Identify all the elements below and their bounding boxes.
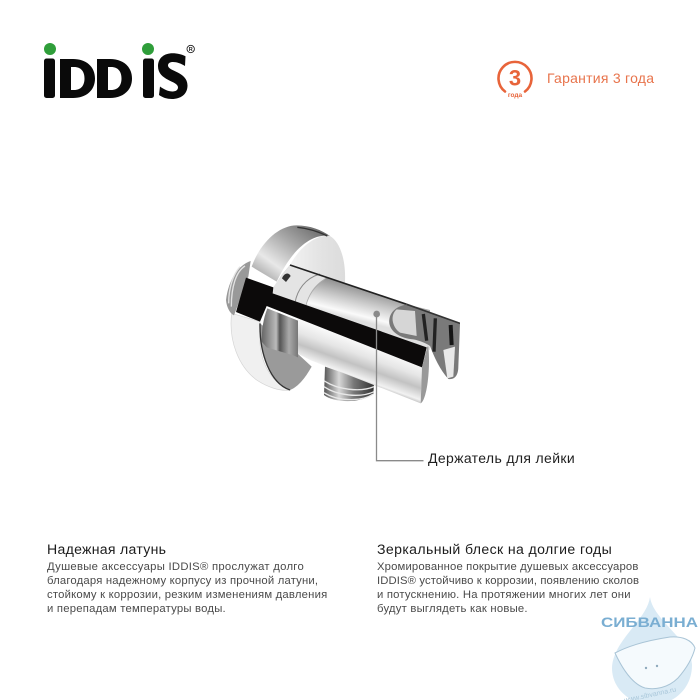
body: mirror shine: Хромированное покрытие душевых аксессуаров <box>377 561 638 573</box>
lower threaded outlet <box>324 367 374 401</box>
callout leader line <box>376 317 424 462</box>
logo: IDDIS <box>44 43 195 99</box>
holder hook and slot <box>389 304 460 379</box>
body: brass <box>47 561 327 615</box>
body: mirror shine: и потускнению. На протяжении многих лет они <box>377 589 631 601</box>
holder arm lower body <box>267 306 422 403</box>
body: mirror shine <box>377 561 639 615</box>
body: mirror shine: будут выглядеть как новые. <box>377 603 528 615</box>
logo: IDDIS: R <box>189 47 193 53</box>
wall flange <box>231 225 345 390</box>
heading: brass: Надежная латунь <box>47 541 166 557</box>
warranty label: Гарантия 3 года <box>547 70 654 86</box>
icon: 3-year warranty badge: 3 <box>509 66 521 90</box>
black reflection band <box>236 278 427 367</box>
body: brass: и перепадам температуры воды. <box>47 603 226 615</box>
arm end cap <box>421 347 429 403</box>
watermark: Sibvanna: СИБВАННА <box>601 614 698 630</box>
text block: brass <box>47 541 327 615</box>
watermark: Sibvanna <box>601 598 698 700</box>
icon: 3-year warranty badge: года <box>508 92 523 99</box>
text block: mirror shine <box>377 541 639 615</box>
body: brass: Душевые аксессуары IDDIS® прослужат долго <box>47 561 304 573</box>
body: brass: благодаря надежному корпусу из прочной латуни, <box>47 575 318 587</box>
body: mirror shine: IDDIS® устойчиво к коррозии, появлению сколов <box>377 575 639 587</box>
heading: mirror shine: Зеркальный блеск на долгие годы <box>377 541 612 557</box>
threaded inlet <box>226 261 251 315</box>
callout label: Держатель для лейки <box>428 450 575 466</box>
holder arm upper body <box>272 265 430 350</box>
body: brass: стойкому к коррозии, резким изменениям давления <box>47 589 327 601</box>
icon: 3-year warranty badge <box>497 60 533 99</box>
callout dot <box>373 311 380 317</box>
product image: shower wall outlet with holder <box>226 225 460 404</box>
lower collar <box>262 308 298 357</box>
